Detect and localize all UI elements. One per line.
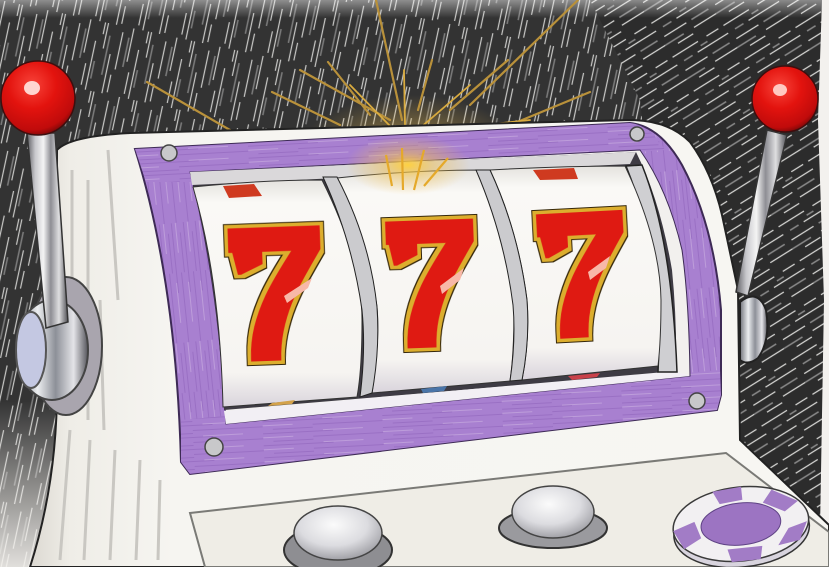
right lever (736, 66, 818, 363)
frame screws (161, 127, 705, 456)
reel divider (323, 177, 378, 397)
casino chip (669, 480, 813, 567)
right button (499, 486, 607, 548)
golden sparks burst (147, 0, 590, 205)
reel symbol peek (533, 168, 578, 180)
reel 2 (323, 170, 514, 397)
purple reel frame (135, 123, 721, 474)
seven: 7 (528, 173, 637, 376)
lever rod: right (736, 130, 787, 296)
control panel (190, 453, 829, 567)
reel symbol peek (421, 386, 447, 393)
window recess (190, 150, 690, 424)
lever hub: left (30, 277, 102, 415)
reel 3 (476, 166, 661, 381)
lever ball: right (752, 66, 818, 132)
left lever (1, 61, 102, 415)
seven: 7 (378, 181, 485, 387)
lever rod: left (27, 133, 68, 328)
spark glow over reels (346, 135, 470, 195)
right inner chrome (626, 165, 677, 372)
reel symbol peek (223, 184, 262, 198)
machine body (30, 120, 829, 567)
reel 1 (193, 180, 362, 407)
lever hub: right (740, 297, 767, 363)
seven: 7 (219, 186, 332, 402)
left button (284, 506, 392, 567)
frame sill (224, 371, 690, 424)
body pencil shading (60, 150, 160, 560)
top inner edge (190, 152, 636, 185)
reel divider (476, 170, 528, 381)
lever ball: left (1, 61, 75, 135)
